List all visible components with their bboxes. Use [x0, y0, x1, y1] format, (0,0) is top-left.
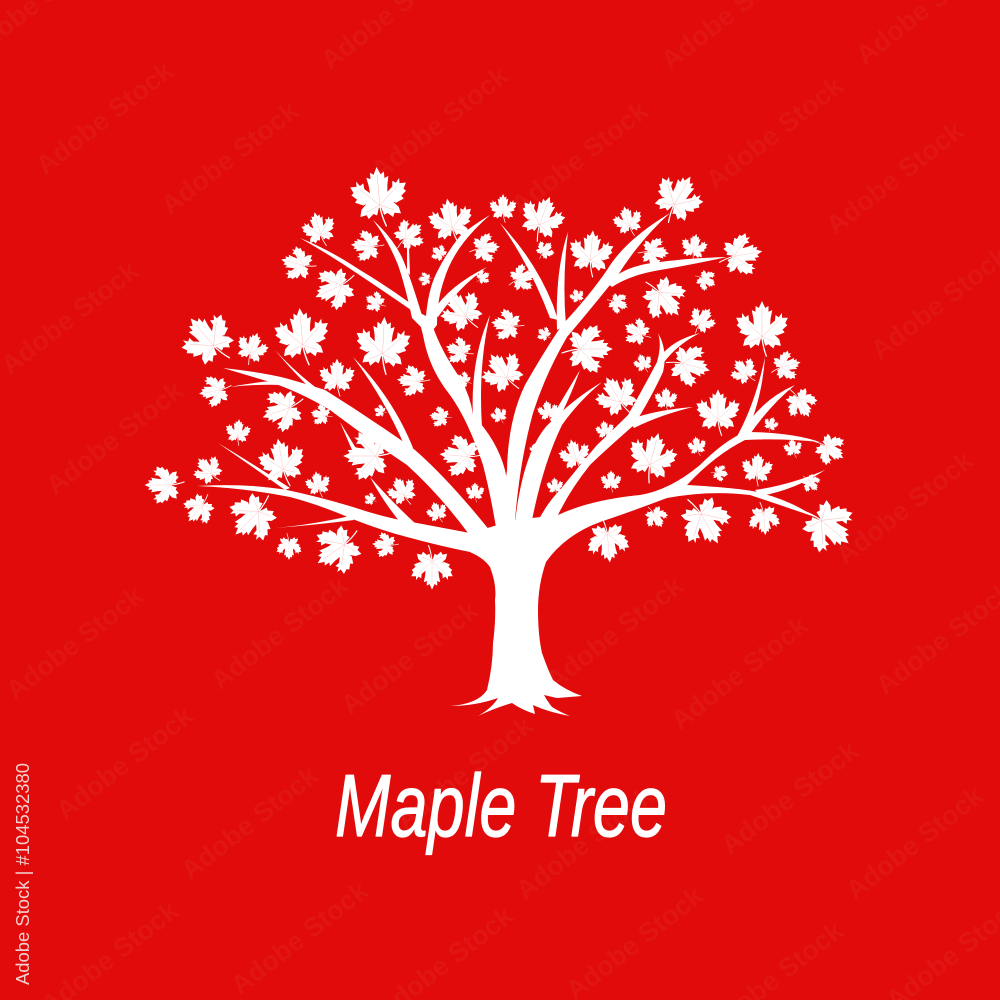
- watermark text: Adobe Stock: [700, 70, 849, 196]
- watermark text: Adobe Stock: [50, 700, 199, 826]
- watermark text: Adobe Stock: [510, 780, 659, 906]
- watermark text: Adobe Stock: [30, 55, 179, 181]
- watermark text: Adobe Stock: [505, 95, 654, 221]
- watermark text: Adobe Stock: [665, 610, 814, 736]
- watermark text: Adobe Stock: [715, 735, 864, 861]
- watermark text: Adobe Stock: [175, 760, 324, 886]
- watermark text: Adobe Stock: [335, 595, 484, 721]
- watermark text: Adobe Stock: [830, 445, 979, 571]
- tree trunk and roots: [450, 515, 600, 716]
- watermark text: Adobe Stock: [390, 710, 539, 836]
- watermark text: Adobe Stock: [365, 60, 514, 186]
- maple tree illustration: [145, 165, 865, 716]
- watermark text: Adobe Stock: [0, 580, 149, 706]
- watermark text: Adobe Stock: [40, 375, 189, 501]
- maple leaves: [145, 165, 865, 590]
- watermark text: Adobe Stock: [540, 570, 689, 696]
- watermark text: Adobe Stock: [840, 780, 989, 906]
- watermark text: Adobe Stock: [225, 875, 374, 1000]
- title: Maple Tree: [335, 756, 667, 855]
- watermark text: Adobe Stock: [155, 95, 304, 221]
- vertical credit line: Adobe Stock | #104532380: [13, 763, 33, 985]
- watermark text: Adobe Stock: [205, 570, 354, 696]
- watermark text: Adobe Stock: [820, 115, 969, 241]
- tree branches: [197, 213, 825, 567]
